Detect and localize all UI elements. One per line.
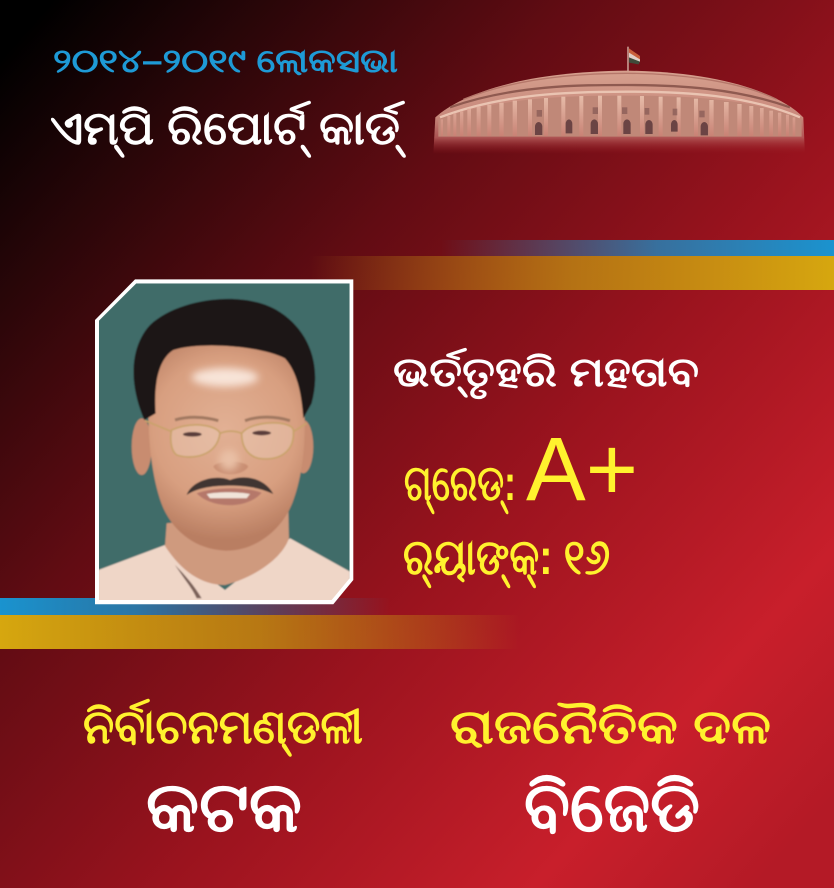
party label: ରାଜନୈତିକ ଦଳ xyxy=(450,701,771,754)
shirt xyxy=(98,538,350,602)
top colour bars xyxy=(310,240,834,290)
rank: ର‍୍ୟାଙ୍କ୍: ୧୬ xyxy=(403,529,610,589)
flag xyxy=(627,47,640,75)
glasses xyxy=(145,421,307,459)
forehead highlight xyxy=(192,368,258,387)
mouth xyxy=(197,488,262,505)
heading: term years: ୨୦୧୪–୨୦୧୯ ଲୋକସଭା xyxy=(53,42,398,79)
colonnade xyxy=(441,96,795,136)
candidate name: ଭର୍ତ୍ତୃହରି ମହତାବ xyxy=(393,348,699,399)
face xyxy=(148,335,305,551)
nose xyxy=(213,462,248,474)
party value: ବିଜେଡି xyxy=(524,768,700,846)
neck xyxy=(165,510,289,585)
arched windows xyxy=(535,107,708,135)
hair xyxy=(134,299,315,420)
constituency value: କଟକ xyxy=(146,768,302,846)
bottom colour bars xyxy=(0,598,520,649)
eyes xyxy=(183,432,202,437)
moustache xyxy=(187,477,273,495)
portrait photo frame xyxy=(95,279,355,606)
collar opening xyxy=(175,565,202,598)
grade label: ଗ୍ରେଡ୍: xyxy=(404,455,516,515)
portrait xyxy=(95,279,355,606)
heading: MP report card: ଏମ୍‌ପି ରିପୋର୍ଟ୍ କାର୍ଡ୍ xyxy=(50,100,407,158)
frame xyxy=(95,279,353,604)
ears xyxy=(132,418,152,475)
constituency label: ନିର୍ବାଚନମଣ୍ଡଳୀ xyxy=(83,699,363,757)
illustration: parliament building xyxy=(433,47,805,154)
eyebrows xyxy=(175,417,290,421)
grade value: A+ xyxy=(526,420,638,520)
